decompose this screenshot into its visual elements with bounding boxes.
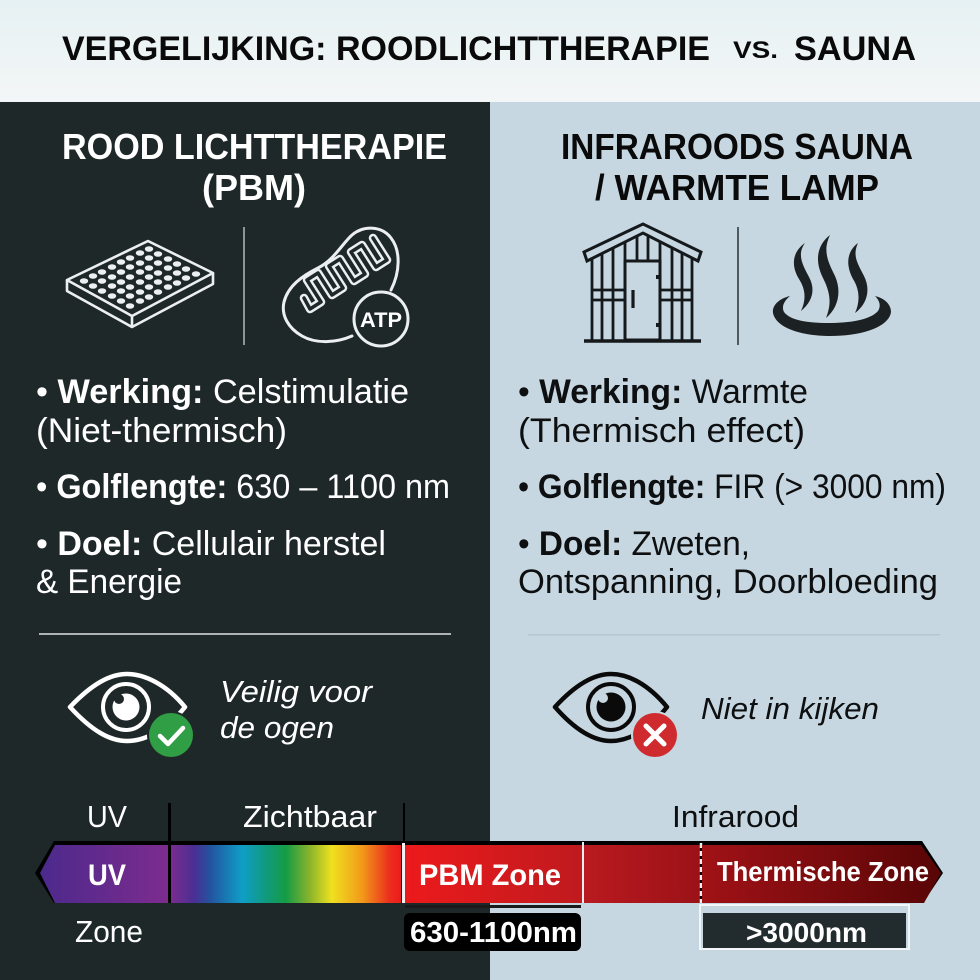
- text: left properties: (Niet-thermisch): [36, 412, 287, 450]
- label: ATP: ATP: [360, 309, 402, 332]
- header band: [0, 0, 980, 102]
- heading: infrared sauna: [561, 126, 913, 208]
- text: left properties: • Golflengte: 630 – 1100 nm: [36, 468, 450, 506]
- badge: 630-1100nm: [404, 905, 581, 951]
- text: safe for eyes: Veilig voor: [220, 674, 374, 709]
- segment: middle infrared: [584, 845, 700, 903]
- title: sauna: SAUNA: [794, 30, 916, 68]
- title: vs: VS.: [733, 37, 778, 64]
- icon: steam: [773, 235, 891, 336]
- heading: red light therapy: ROOD LICHTTHERAPIE: [62, 126, 447, 167]
- text: safe for eyes: [220, 674, 374, 745]
- text: right properties: • Werking: Warmte: [518, 373, 808, 411]
- text: left properties: [36, 373, 450, 601]
- badge: 630-1100nm: 630-1100nm: [410, 917, 577, 949]
- divider: left icons: [243, 227, 245, 345]
- text: safe for eyes: de ogen: [220, 710, 334, 745]
- panel: right background: [490, 102, 980, 980]
- label: infrared: Infrarood: [672, 799, 799, 834]
- text: left properties: • Doel: Cellulair herstel: [36, 525, 386, 563]
- icon: unsafe eye with cross: [555, 674, 679, 759]
- badge: >3000nm: [700, 905, 909, 949]
- label: thermal zone: Thermische Zone: [717, 856, 929, 887]
- segment: thermal zone: [702, 845, 941, 903]
- spectrum bar: [35, 841, 943, 903]
- icon: safe eye with check: [70, 674, 195, 759]
- heading: infrared sauna: INFRAROODS SAUNA: [561, 126, 913, 167]
- icon: sauna cabin: [584, 224, 701, 341]
- panel: left background: [0, 102, 490, 980]
- heading: red light therapy: (PBM): [202, 167, 306, 208]
- heading: infrared sauna: / WARMTE LAMP: [595, 167, 879, 208]
- segment: visible spectrum: [171, 845, 401, 903]
- label: PBM zone: PBM Zone: [419, 859, 561, 892]
- title: VERGELIJKING: ROODLICHTTHERAPIE: [62, 30, 710, 68]
- text: left properties: • Werking: Celstimulatie: [36, 373, 409, 411]
- segment: PBM zone: [405, 845, 582, 903]
- divider: right icons: [737, 227, 739, 345]
- label: visible: Zichtbaar: [243, 799, 377, 834]
- badge: >3000nm: >3000nm: [746, 917, 867, 948]
- heading: red light therapy: [62, 126, 447, 208]
- icon: mitochondrion with ATP: [283, 228, 408, 346]
- text: do not look: Niet in kijken: [701, 691, 879, 726]
- label: zone: Zone: [75, 914, 143, 949]
- text: right properties: (Thermisch effect): [518, 412, 805, 450]
- text: right properties: • Doel: Zweten,: [518, 525, 750, 563]
- label: UV in bar: UV: [88, 859, 126, 892]
- label: UV: UV: [87, 799, 127, 834]
- text: right properties: • Golflengte: FIR (> 3000 nm): [518, 468, 946, 506]
- text: left properties: & Energie: [36, 563, 182, 601]
- text: right properties: [518, 373, 946, 601]
- text: right properties: Ontspanning, Doorbloeding: [518, 563, 938, 601]
- icon: LED panel: [67, 241, 213, 327]
- segment: UV: [40, 845, 168, 903]
